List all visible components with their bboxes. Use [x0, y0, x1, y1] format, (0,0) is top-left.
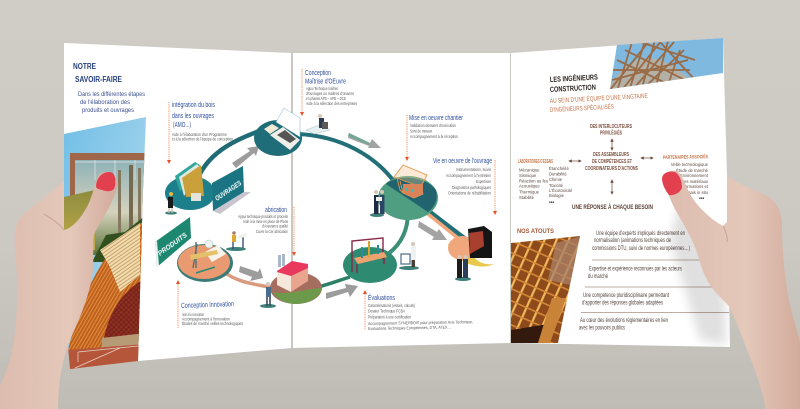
text block: conception innovation: [176, 280, 243, 328]
sign: produits: [155, 217, 191, 267]
thumb shadow: [670, 200, 726, 345]
text block: fabrication: abrication: [265, 205, 287, 214]
arrow: grey 4: [326, 284, 358, 299]
fold lines: [292, 53, 511, 348]
node: laboratoires: [518, 159, 573, 206]
icon: worker: [260, 282, 276, 308]
icon: draftsman: [226, 231, 247, 251]
arrow: grey 1: [232, 146, 259, 168]
node: laboratoires: Toxicité: [549, 183, 564, 188]
icon: damaged building: [468, 226, 492, 258]
text block: vie en oeuvre de l'ouvrage: Vie en oeuvre de l'ouvrage: [433, 156, 492, 165]
text block: intégration du bois: Aide à l'élaboration d'un Programme: [172, 132, 228, 137]
intro text: de l'élaboration des: [80, 99, 131, 106]
node: partenaires: Bases matériaux: [677, 179, 709, 184]
text block: intégration du bois: et à la sélection de l'équipe de conception: [172, 136, 234, 142]
text block: intégration du bois: [167, 100, 234, 164]
text block: vie en oeuvre de l'ouvrage: Orientations de réhabilitation: [448, 190, 492, 196]
arrow: grey 3: [418, 221, 447, 240]
text block: mise en oeuvre chantier: Accompagnement à la réception: [410, 134, 459, 139]
icon: person with yellow hair: [165, 192, 177, 215]
icon: house frame: [394, 165, 427, 198]
connector: house to evaluations: [388, 212, 408, 254]
subheading: [550, 91, 648, 114]
title: NOTRE: [73, 62, 97, 71]
text block: mise en oeuvre chantier: [405, 113, 463, 161]
node: partenaires: Veille technologique: [671, 162, 709, 167]
heading: nos atouts: NOS ATOUTS: [517, 228, 555, 235]
node: partenaires: •••: [699, 196, 705, 202]
icon: two people with plan: [370, 190, 384, 217]
photo: timber building: [64, 117, 146, 369]
panel: centre page: [292, 53, 511, 348]
list: atouts: Expertise et expérience reconnues par les acteurs: [589, 266, 682, 272]
hand: right: [662, 171, 800, 409]
connector: laptop to house: [298, 134, 396, 184]
text block: intégration du bois: (AMO...): [173, 120, 191, 129]
text block: conception innovation: Conception Innovation: [181, 299, 234, 310]
node: laboratoires: Chimie: [549, 177, 563, 182]
list: atouts: d'apporter des réponses globales adaptées: [582, 300, 663, 306]
node: partenaires: [663, 152, 709, 202]
icon: couple: [455, 255, 471, 281]
text block: fabrication: d'Assurance qualité: [262, 224, 288, 228]
diagram: organisation: [518, 124, 709, 211]
node: partenaires: Environnement: [680, 173, 709, 178]
icon: left nail: [96, 172, 115, 191]
text block: conception maîtrise d'oeuvre: [300, 68, 357, 116]
node: laboratoires: Mécanique: [519, 168, 540, 172]
text block: conception maîtrise d'oeuvre: Maîtrise d'OEuvre: [305, 76, 346, 86]
connector: house to renovation: [424, 208, 466, 240]
heading: les ingénieurs construction: LES INGÉNIEURS: [550, 72, 598, 84]
node: laboratoires: LABORATOIRES D'ESSAIS: [518, 159, 553, 165]
text block: conception maîtrise d'oeuvre: Appui Technique maîtres: [306, 86, 338, 91]
list: atouts: commissions DTU, suivi de normes européennes…): [592, 246, 690, 252]
text block: conception maîtrise d'oeuvre: Aide à la sélection des entreprises: [306, 101, 357, 106]
node: partenaires: Étude de marché: [676, 168, 709, 173]
list: atouts: Au cœur des évolutions réglementaires en lien: [580, 318, 668, 324]
icon: architect: [306, 114, 330, 134]
subheading: AU SEIN D'UNE ÉQUIPE D'UNE VINGTAINE: [550, 91, 648, 105]
node: laboratoires: L'Écotoxicité: [549, 188, 573, 193]
text block: fabrication: [238, 205, 296, 256]
node: assembleurs: COORDINATEURS D'ACTIONS: [585, 166, 638, 172]
text block: vie en oeuvre de l'ouvrage: [433, 156, 497, 215]
icon: lab technician: [399, 242, 419, 270]
text block: fabrication: Cuvre la Cer abrication: [256, 229, 288, 234]
node: partenaires: Essais in situ: [684, 190, 709, 195]
connector: evaluations to factory: [318, 277, 350, 287]
text block: mise en oeuvre chantier: Suivi de travaux: [410, 128, 433, 134]
text block: évaluations: Accompagnement SYNERBOIS pour préparation Avis Technique,: [368, 319, 473, 326]
list: atouts: du marché: [588, 274, 608, 280]
title: SAVOIR-FAIRE: [75, 75, 123, 84]
text block: évaluations: Caractérisations (essais, calculs): [368, 303, 415, 308]
text block: vie en oeuvre de l'ouvrage: Instrumentations, suivis: [456, 167, 491, 172]
node: laboratoires: Réaction au feu: [519, 178, 549, 184]
node: laboratoires: Acoustique: [519, 184, 540, 188]
node: interlocuteurs: PRIVILÉGIÉS: [600, 128, 622, 136]
disc: house: [378, 176, 438, 220]
text block: fabrication: Appui technique produits et process: [238, 214, 288, 219]
subheading: D'INGÉNIEURS SPÉCIALISÉS: [550, 102, 614, 114]
text block: évaluations: Évaluations: [368, 293, 395, 302]
node: laboratoires: Stabilité: [519, 195, 535, 200]
node: laboratoires: •••: [549, 200, 555, 206]
text block: vie en oeuvre de l'ouvrage: Accompagnement à l'entretien: [446, 173, 492, 178]
panel: right page: [510, 35, 730, 347]
arrows: links: [570, 140, 652, 193]
intro text: produits et ouvrages: [82, 107, 135, 114]
text block: vie en oeuvre de l'ouvrage: Diagnostics pathologiques: [452, 185, 491, 190]
node: interlocuteurs: [590, 124, 632, 136]
node: assembleurs: [585, 152, 638, 172]
text block: évaluations: Evaluations Techniques Européennes, DTA, ATEX…: [368, 325, 451, 331]
disc: factory: [270, 272, 322, 304]
connector: ouvrages to laptop: [198, 130, 262, 178]
text block: mise en oeuvre chantier: Validation dossiers d'exécution: [410, 123, 457, 128]
photo: timber lattice: [510, 235, 582, 345]
node: assembleurs: DES ASSEMBLEURS: [593, 152, 629, 158]
list: atouts: Une compétence pluridisciplinaire permettant: [583, 293, 669, 299]
text block: intégration du bois: intégration du bois: [172, 100, 215, 109]
text block: conception innovation: Accompagnement à l'innovation: [182, 316, 231, 322]
text block: conception maîtrise d'oeuvre: d'ouvrages ou maîtres d'œuvres: [306, 91, 354, 96]
arrow: grey 5: [239, 266, 263, 281]
heading: les ingénieurs construction: CONSTRUCTION: [550, 83, 596, 94]
node: laboratoires: Étanchéité: [549, 166, 569, 171]
text block: conception innovation: Études de marché veilles technologiques: [182, 321, 243, 326]
list: atouts: [579, 231, 729, 332]
text block: conception maîtrise d'oeuvre: Conception: [305, 68, 331, 77]
intro text: [78, 91, 146, 114]
text block: évaluations: Préparation à une certification: [368, 314, 412, 320]
sign: produits: PRODUITS: [157, 232, 189, 258]
disc: renovation: [448, 240, 494, 267]
sign: ouvrages: OUVRAGES: [214, 180, 243, 203]
node: interlocuteurs: DES INTERLOCUTEURS: [590, 124, 632, 130]
text block: mise en oeuvre chantier: Mise en oeuvre chantier: [409, 113, 463, 122]
disc: evaluations: [343, 247, 397, 283]
icon: test bench: [352, 238, 387, 273]
arrow: grey 2: [348, 133, 381, 148]
icon: folders: [175, 162, 204, 201]
text block: évaluations: Dossier Technique FCBA: [368, 308, 405, 314]
text block: intégration du bois: dans les ouvrages: [172, 111, 214, 120]
node: laboratoires: Durabilité: [549, 172, 567, 176]
text block: conception innovation: Aide à la conception: [182, 312, 204, 317]
intro text: Dans les différentes étapes: [78, 91, 146, 98]
hand: left: [0, 172, 117, 409]
sign: ouvrages: [212, 166, 251, 214]
node: laboratoires: Thermique: [519, 190, 540, 194]
icon: right nail: [662, 172, 682, 195]
text block: vie en oeuvre de l'ouvrage: Expertises: [476, 179, 491, 184]
icon: tools: [190, 240, 226, 273]
heading: les ingénieurs construction: [550, 72, 598, 94]
node: assembleurs: DE COMPÉTENCES ET: [592, 157, 633, 165]
title: [73, 62, 123, 84]
disc: produits: [177, 244, 233, 282]
disc: ouvrages: [165, 176, 215, 210]
list: atouts: avec les pouvoirs publics: [579, 326, 625, 332]
node: partenaires: PARTENAIRES ASSOCIÉS: [663, 152, 709, 161]
icon: factory: [277, 254, 308, 292]
node: réponse: UNE RÉPONSE À CHAQUE BESOIN: [572, 202, 653, 211]
list: atouts: normalisation (animations techniques de: [594, 238, 671, 244]
node: laboratoires: Sismique: [519, 173, 537, 178]
text block: évaluations: [363, 290, 473, 331]
list: atouts: Une équipe d'experts impliqués directement en: [596, 231, 685, 237]
icon: laptop: [264, 108, 300, 150]
text block: fabrication: Aide à la mise en place de Plans: [243, 219, 288, 224]
panel: left page: [60, 43, 292, 372]
disc: laptop: [254, 120, 302, 156]
node: partenaires: Informations et: [680, 184, 709, 189]
node: laboratoires: Biologie: [549, 193, 565, 198]
diagram: process loop: [155, 108, 494, 308]
connector: factory to produits: [224, 272, 272, 288]
text block: conception maîtrise d'oeuvre: en phases APS – APD – DCE: [306, 96, 346, 101]
photo: timber frame top: [610, 38, 723, 89]
